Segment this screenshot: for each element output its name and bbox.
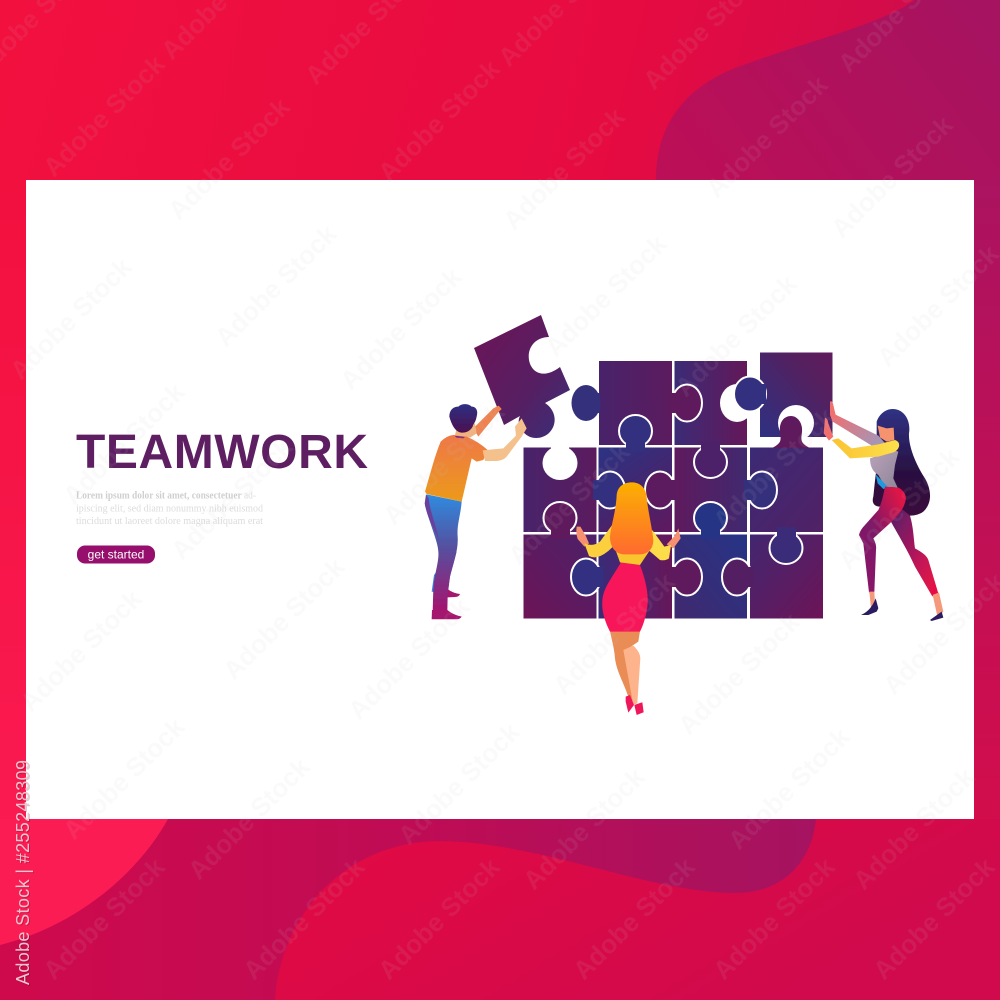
watermarks: Adobe Stock — [209, 218, 343, 352]
left sleeve — [584, 521, 618, 557]
watermarks: Adobe Stock — [372, 851, 506, 985]
collar — [454, 436, 465, 438]
get started button — [77, 546, 155, 564]
piece: top right being pushed — [734, 352, 832, 448]
knob: upward into top row — [619, 415, 652, 452]
watermarks: Adobe Stock — [377, 396, 511, 530]
background: bottom base — [0, 819, 1000, 1000]
watermarks: Adobe Stock — [182, 751, 316, 885]
piece: third row second column — [598, 534, 672, 618]
white panel — [26, 180, 974, 819]
watermarks: Adobe Stock — [707, 401, 841, 535]
raised arm — [473, 406, 502, 437]
piece: top row third column — [674, 361, 747, 445]
knob: second row leftward — [645, 472, 677, 508]
watermarks: Adobe Stock — [392, 716, 526, 850]
trouser shadow — [425, 494, 439, 542]
knob: third row into third column — [670, 558, 702, 596]
piece: top row second column — [599, 361, 672, 445]
watermarks: Adobe Stock — [4, 251, 138, 385]
watermarks: Adobe Stock — [37, 48, 171, 182]
watermarks: Adobe Stock — [237, 851, 371, 985]
watermarks: Adobe Stock — [372, 53, 506, 187]
knob: third row into first column — [571, 558, 603, 596]
piece: second row second column — [598, 448, 672, 532]
knob: second row into second column — [593, 472, 625, 508]
watermarks: Adobe Stock — [497, 101, 631, 235]
watermarks: Adobe Stock — [700, 69, 834, 203]
lorem ipsum text block: tincidunt ut laoreet dolore magna aliquam erat — [76, 516, 263, 527]
notch: white in second row first column — [542, 446, 578, 480]
watermarks: Adobe Stock — [517, 761, 651, 895]
piece: third row first column — [524, 534, 596, 618]
watermarks: Adobe Stock — [847, 761, 981, 895]
ankle back — [933, 592, 943, 618]
watermarks: Adobe Stock — [217, 551, 351, 685]
lorem ipsum text block: ipiscing elit, sed diam nonummy nibh euismod — [76, 504, 263, 514]
watermarks: Adobe Stock — [37, 851, 171, 985]
piece: second row fourth column — [750, 448, 823, 532]
back shoe — [447, 589, 460, 597]
watermarks: Adobe Stock — [832, 441, 966, 575]
shoe back — [930, 612, 943, 621]
front shoe — [432, 610, 462, 619]
neck of white notch — [551, 445, 569, 451]
yellow sleeve — [832, 438, 899, 458]
torso — [870, 450, 898, 488]
knob: top row into third column — [669, 384, 702, 422]
lorem ipsum text block — [76, 490, 263, 527]
stock id text: Adobe Stock | #255248309 — [14, 761, 34, 986]
piece: third row fourth column — [750, 534, 823, 618]
notch neck — [785, 432, 807, 440]
left shoe — [626, 695, 634, 713]
knob: third row up into third column — [694, 502, 727, 539]
watermarks: Adobe Stock — [567, 851, 701, 985]
notch of top right piece — [778, 405, 814, 441]
background blob: bottom left — [0, 819, 168, 945]
person: woman in centre — [576, 482, 681, 715]
watermarks: Adobe Stock — [162, 91, 296, 225]
background strip: left — [0, 180, 26, 820]
back leg — [890, 508, 939, 596]
right shoe — [634, 702, 644, 715]
watermarks: Adobe Stock — [867, 851, 1000, 985]
watermarks: Adobe Stock — [722, 721, 856, 855]
knob: third row up into first column — [544, 502, 576, 539]
shirt — [425, 435, 488, 502]
watermarks: Adobe Stock — [672, 606, 806, 740]
piece: third row third column — [674, 534, 747, 618]
knob: second row into fourth column — [744, 472, 777, 508]
background blob: bottom band — [0, 819, 816, 1000]
background strip: right — [974, 180, 1000, 822]
get started button: get started — [88, 548, 144, 562]
watermarks: Adobe Stock — [502, 436, 636, 570]
puzzle — [474, 315, 832, 618]
knob: second row down into fourth column — [770, 527, 802, 564]
watermarks: Adobe Stock — [539, 228, 673, 362]
watermarks: Adobe Stock — [14, 583, 148, 717]
back leg — [432, 552, 457, 595]
long hair — [873, 409, 930, 516]
watermarks: Adobe Stock — [165, 431, 299, 565]
legs dark — [610, 631, 640, 702]
front leg — [859, 487, 906, 592]
knob: left of top row — [572, 385, 600, 421]
person: man on left — [425, 404, 527, 619]
title: TEAMWORK — [76, 426, 368, 479]
knob: fourth column into third column — [722, 558, 754, 596]
front arm — [483, 418, 527, 461]
knob rising from fourth column — [772, 416, 810, 448]
right hand — [667, 528, 681, 548]
back arm — [832, 414, 887, 446]
hair — [449, 404, 477, 433]
neck and face — [455, 423, 477, 438]
shoe front — [861, 598, 878, 615]
ankle front — [869, 592, 875, 608]
lorem ipsum text block: Lorem ipsum dolor sit amet, consectetuer ad- — [76, 490, 256, 502]
watermarks: Adobe Stock — [825, 109, 959, 243]
piece: tilted held by man — [474, 315, 570, 438]
watermarks: Adobe Stock — [342, 591, 476, 725]
left knob of top right piece — [734, 376, 766, 412]
watermarks: Adobe Stock — [547, 566, 681, 700]
knob: downward into second row third column — [694, 441, 727, 478]
watermarks: Adobe Stock — [669, 268, 803, 402]
leg light — [623, 646, 640, 705]
blue top — [876, 474, 888, 489]
left hand — [576, 527, 589, 547]
watermarks: Adobe Stock — [334, 261, 468, 395]
trousers — [425, 494, 462, 612]
stock id text: Adobe Stock | #255248309 — [13, 760, 33, 985]
watermarks: Adobe Stock — [707, 851, 841, 985]
background blob: top right — [656, 0, 1000, 182]
right sleeve — [648, 530, 671, 560]
watermarks: Adobe Stock — [57, 711, 191, 845]
face — [878, 426, 894, 442]
person: woman on right — [824, 401, 943, 621]
yellow top — [614, 547, 650, 565]
watermarks: Adobe Stock — [57, 376, 191, 510]
piece: second row first column — [524, 448, 596, 532]
long hair — [610, 482, 653, 554]
knob neck — [756, 384, 766, 404]
notch: white beside top right piece — [720, 384, 754, 422]
upper hand — [830, 401, 836, 421]
skirt — [602, 562, 648, 632]
lower hand — [824, 418, 833, 441]
piece: second row third column — [674, 448, 747, 532]
